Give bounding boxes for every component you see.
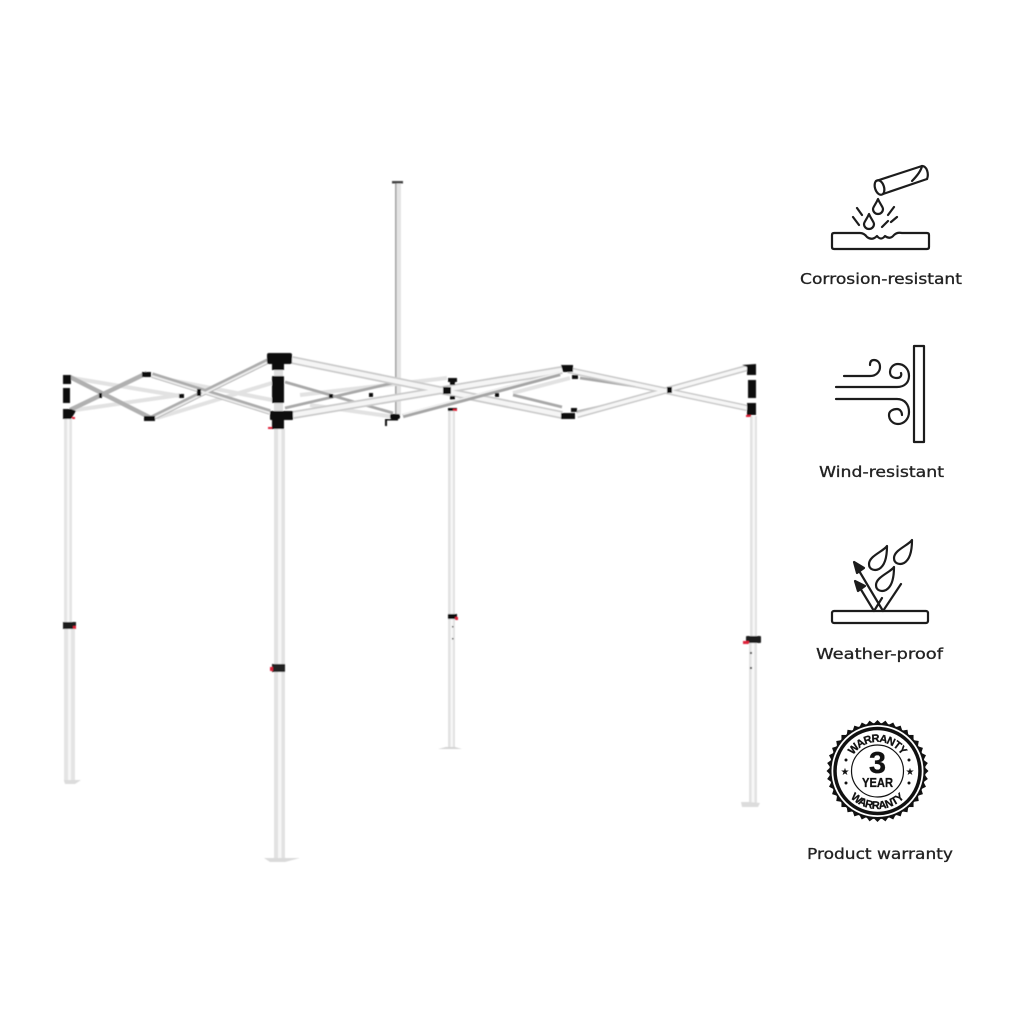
icon: warranty badge: WARRANTY (847, 734, 908, 754)
front-left scissor bay (70, 360, 270, 419)
tent frame (63, 181, 761, 862)
label: Weather-proof (816, 645, 944, 663)
rear scissor members (72, 377, 669, 418)
icon: warranty badge: ★ (906, 767, 915, 778)
icon: wind (836, 346, 924, 442)
feature: product warranty (807, 720, 953, 863)
icon: weather (832, 540, 928, 623)
icon: warranty badge (826, 720, 928, 822)
feature: corrosion-resistant (800, 166, 962, 288)
icon: warranty badge: YEAR (862, 775, 894, 790)
label: Corrosion-resistant (800, 270, 962, 288)
feature: weather-proof (816, 540, 944, 663)
badge serrated edge (827, 720, 928, 822)
icon: warranty badge: WARRANTY (852, 792, 903, 810)
right post (741, 364, 761, 807)
frame joints (99, 365, 672, 426)
icon: corrosion (832, 166, 929, 249)
icon: warranty badge: ★ (841, 767, 850, 778)
left post (63, 375, 81, 784)
label: Product warranty (807, 845, 953, 863)
center pole (392, 181, 403, 415)
feature: wind-resistant (819, 346, 944, 481)
right scissor bay (568, 368, 747, 415)
label: Wind-resistant (819, 463, 944, 481)
front-right scissor bay (292, 360, 562, 416)
front post (264, 353, 300, 862)
rear post (438, 378, 462, 749)
icon: warranty badge: 3 (869, 745, 886, 780)
